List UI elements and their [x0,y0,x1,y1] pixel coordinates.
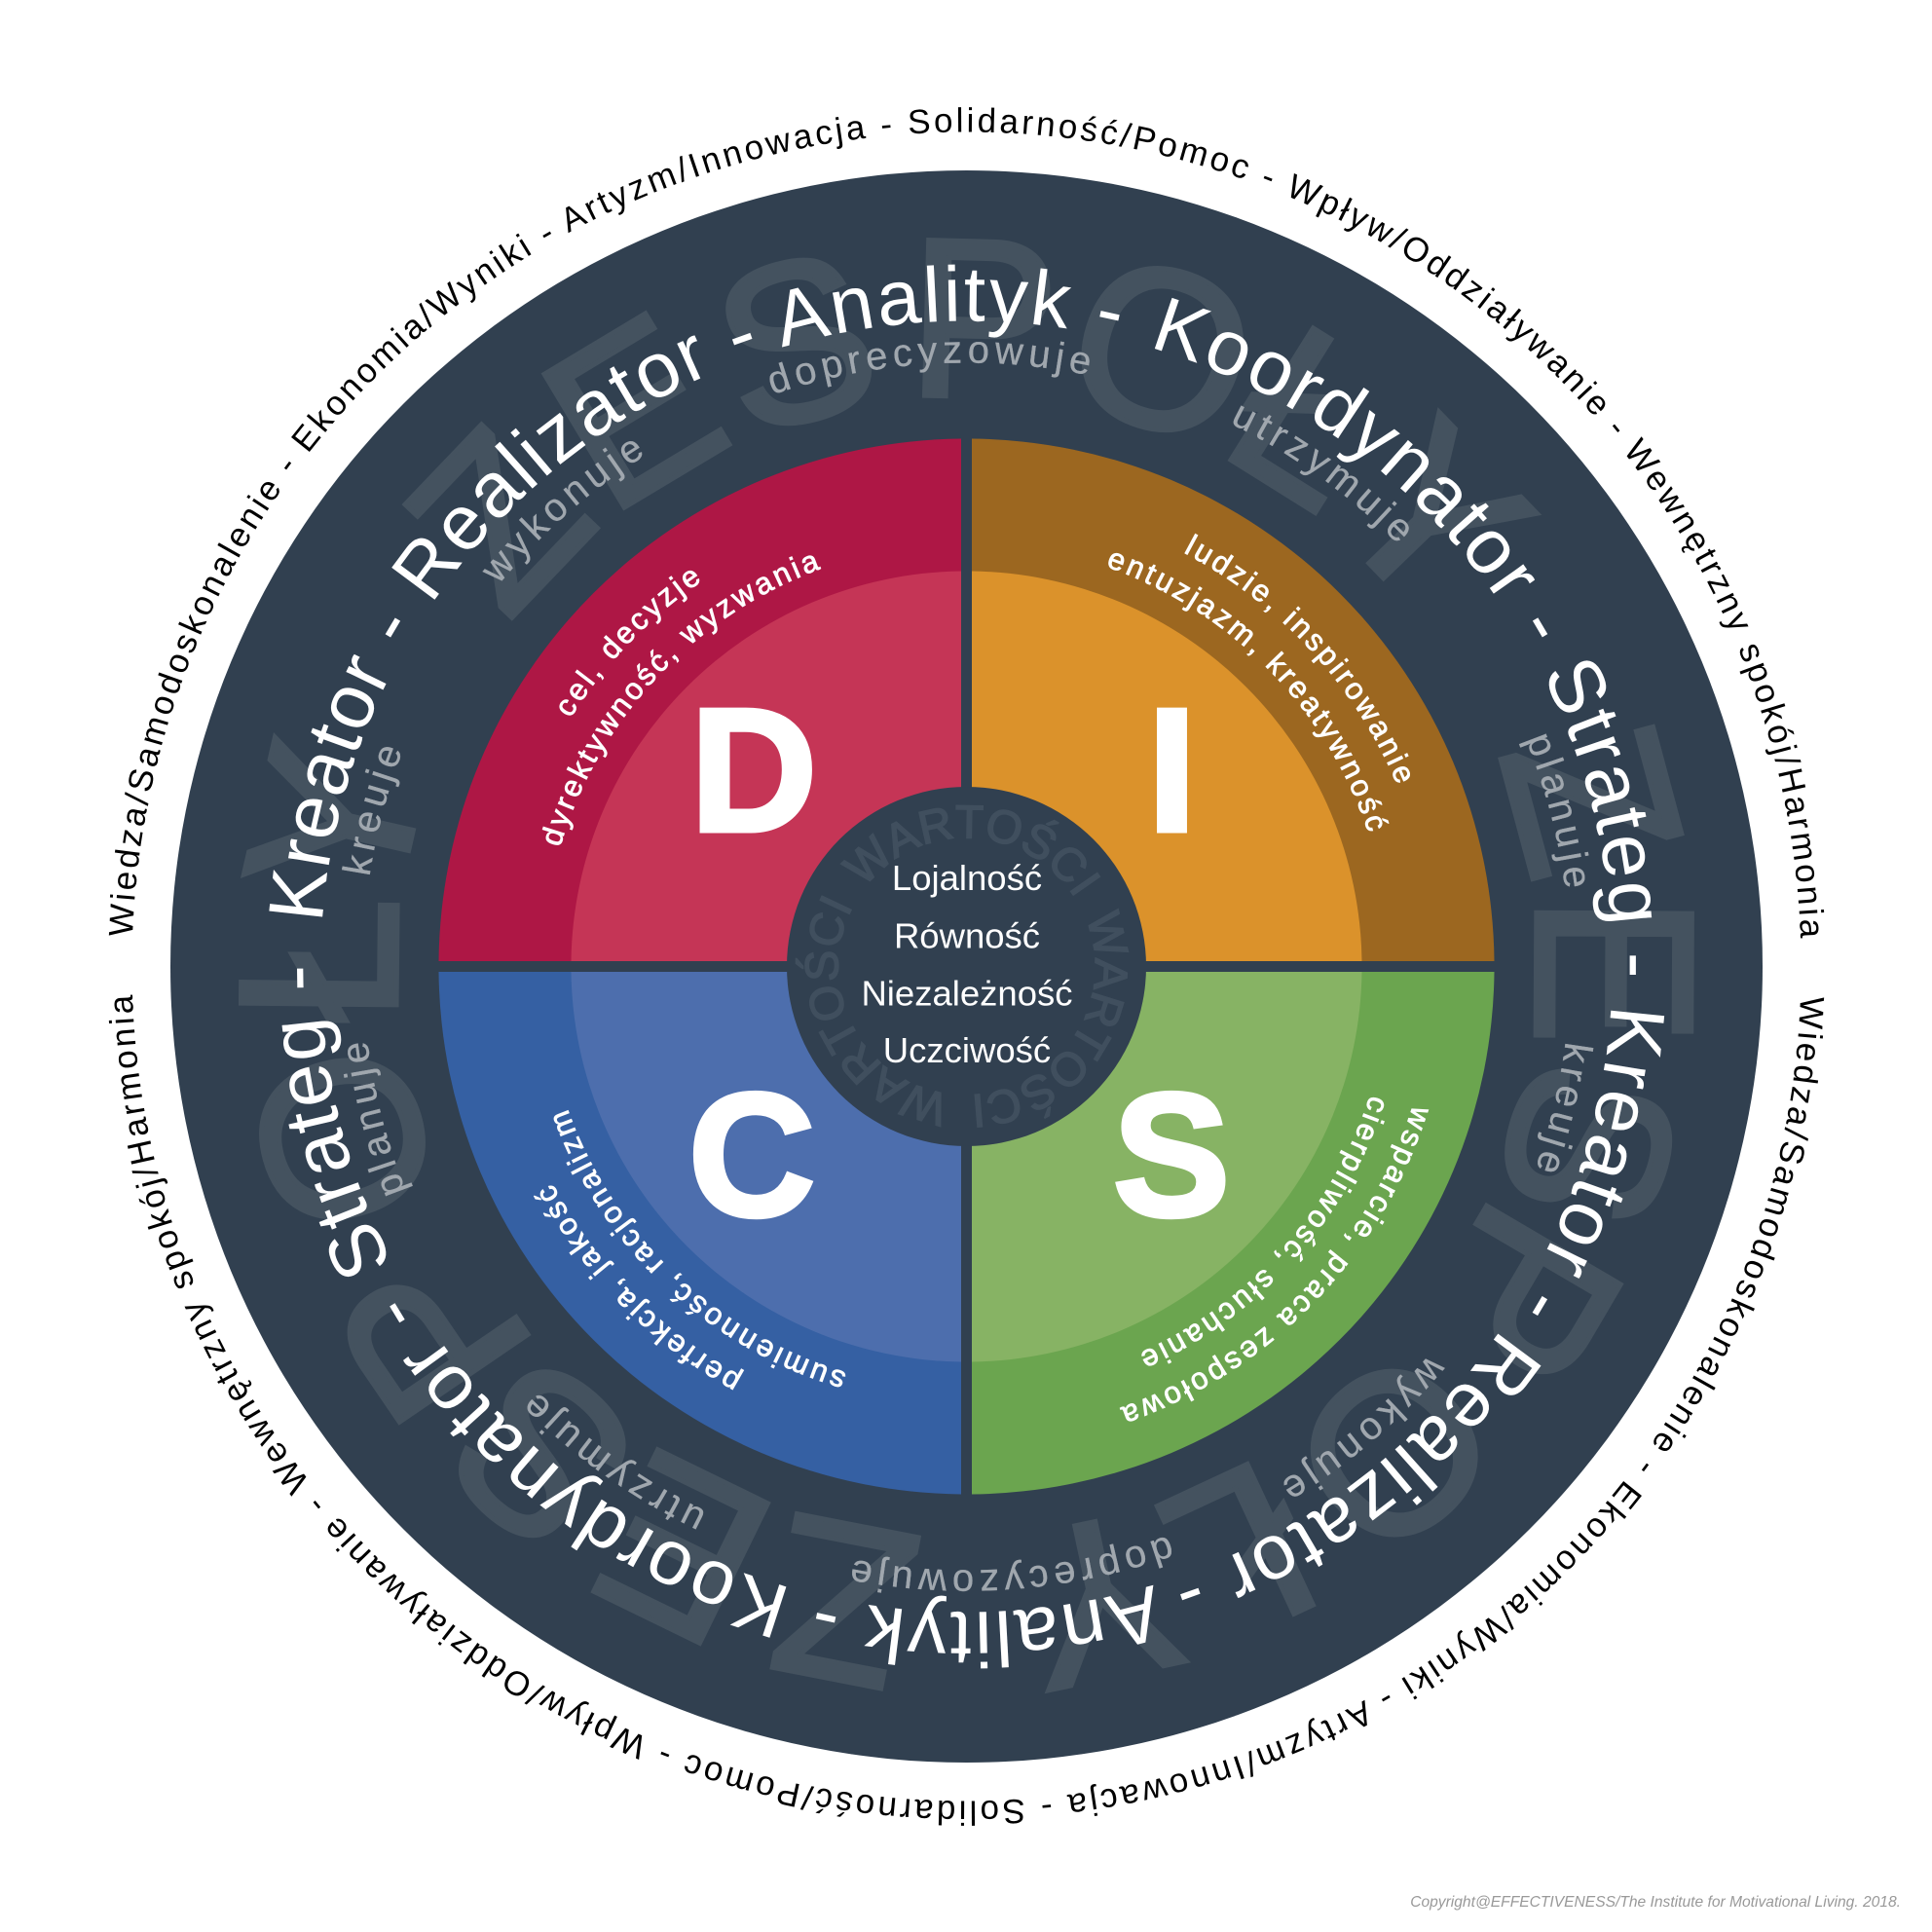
D traits: dyrektywność, wyzwania [541,555,822,845]
S traits: wsparcie, praca zespołowa [1120,1108,1430,1422]
watermark: ZESPOŁY letters around ring [193,192,1740,1738]
watermark: ZESPOŁY letters around ring: P [285,1198,578,1465]
C traits: perfekcja, jakość [534,1186,744,1391]
watermark: ZESPOŁY letters around ring: P [905,192,1062,448]
watermark: ZESPOŁY letters around ring: Ł [1189,278,1430,558]
verbs on ring: planuje [343,1043,413,1196]
panel: S quadrant [972,972,1494,1494]
I traits: ludzie, inspirowanie [1184,534,1410,783]
letter C: C [688,1058,815,1253]
values list: Uczciwość [883,1030,1051,1070]
letter S: S [1113,1058,1230,1253]
panel: centre values [787,787,1146,1146]
circular WARTOŚCI watermark [795,804,1130,1128]
watermark: ZESPOŁY letters around ring: O [1245,1300,1542,1606]
circular WARTOŚCI watermark: WARTOŚCI [795,896,941,1128]
watermark: ZESPOŁY letters around ring: Ł [193,896,446,1023]
watermark: ZESPOŁY letters around ring: E [1487,894,1740,1046]
watermark: ZESPOŁY letters around ring: E [560,1401,806,1694]
circular WARTOŚCI watermark: WARTOŚCI [839,804,1100,896]
verbs on ring: kreuje [1538,1044,1593,1172]
verbs on ring: utrzymuje [1233,405,1409,541]
watermark: ZESPOŁY letters around ring: S [402,1311,682,1600]
watermark: ZESPOŁY letters around ring: Z [1452,700,1731,898]
S traits: cierpliwość, słuchanie [1141,1096,1385,1366]
circular WARTOŚCI watermark: WARTOŚCI [974,909,1130,1128]
verbs on ring: utrzymuje [528,1394,703,1529]
watermark: ZESPOŁY letters around ring: O [198,1021,488,1256]
verbs on ring: wykonuje [1283,1358,1445,1497]
verbs on ring: doprecyzowuje [769,341,1090,393]
outer ring text: values: Wiedza/Samodoskonalenie - Ekonomia/Wyniki - Artyzm/Innowacja - Solidarność/Pomoc - Wpływ/Oddziaływanie - Wewnętrzny spokój/Harmonia [109,107,1825,939]
watermark: ZESPOŁY letters around ring: Ł [1130,1412,1351,1693]
watermark: ZESPOŁY letters around ring: O [1040,203,1284,497]
D traits: cel, decyzje [559,571,699,716]
letter D: D [690,673,817,869]
verbs on ring: wykonuje [483,441,643,580]
outer ring text: values: Wiedza/Samodoskonalenie - Ekonomia/Wyniki - Artyzm/Innowacja - Solidarność/Pomoc - Wpływ/Oddziaływanie - Wewnętrzny spokój/Harmonia [109,995,1825,1826]
panel: I quadrant [972,438,1494,961]
dark outer disc [170,170,1763,1763]
watermark: ZESPOŁY letters around ring: Z [751,1465,935,1738]
panel: D quadrant [438,438,961,961]
values list: Lojalność [892,858,1042,898]
C traits: sumienność, racjonalizm [553,1110,845,1387]
verbs on ring: doprecyzowuje [852,1537,1171,1593]
copyright: Copyright@EFFECTIVENESS/The Institute for Motivational Living. 2018. [1410,1894,1901,1911]
values list [861,858,1073,1070]
I traits: entuzjazm, kreatywność [1108,553,1389,832]
role ring text: Strateg - Kreator - Realizator - Analityk - Koordynator - [390,660,1665,1669]
watermark: ZESPOŁY letters around ring: Y [1289,375,1575,659]
watermark: ZESPOŁY letters around ring: P [1378,1165,1671,1423]
values list: Równość [894,915,1040,956]
watermark: ZESPOŁY letters around ring: E [503,265,762,559]
verbs on ring: planuje [1519,734,1589,886]
watermark: ZESPOŁY letters around ring: S [689,201,902,484]
watermark: ZESPOŁY letters around ring: Z [360,383,638,656]
values list: Niezależność [861,974,1073,1013]
verbs on ring [342,341,1593,1593]
panel: C quadrant [438,972,961,1494]
letter I: I [1147,673,1197,869]
role ring text: Strateg - Kreator - Realizator - Analityk - Koordynator - [269,265,1548,1278]
verbs on ring: kreuje [342,747,401,874]
watermark: ZESPOŁY letters around ring: Y [1001,1461,1201,1738]
watermark: ZESPOŁY letters around ring: S [1446,1038,1730,1252]
watermark: ZESPOŁY letters around ring: Y [196,722,475,924]
